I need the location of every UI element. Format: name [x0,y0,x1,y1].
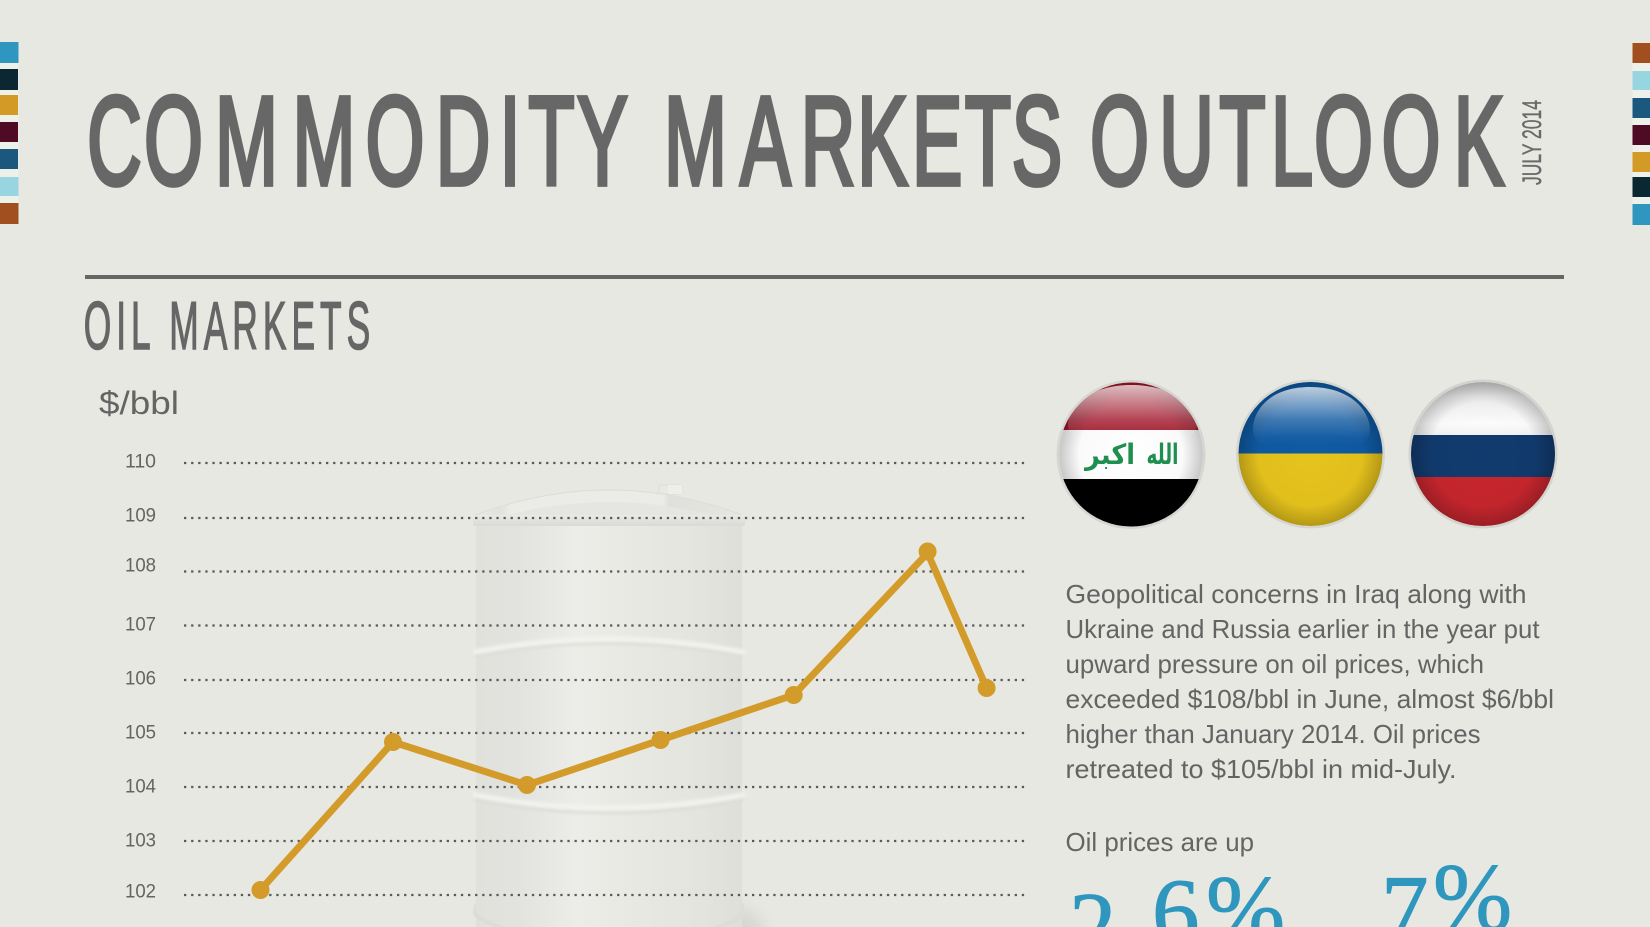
y axis labels: 104 [125,776,156,798]
date label: JULY 2014 [1517,100,1547,185]
y axis labels: 102 [125,882,156,902]
left colour swatch strip [0,42,18,224]
y axis labels: 110 [125,452,156,472]
axis unit label: $/bbl [99,385,179,421]
top rim [473,515,745,526]
barrel lid [473,490,745,518]
dotted gridlines [184,463,1025,895]
description paragraph: exceeded $108/bbl in June, almost $6/bbl [1066,684,1554,714]
y axis labels: 108 [125,556,156,576]
bottom rim [473,902,745,927]
y axis labels: 106 [125,668,156,690]
barrel cap [659,485,682,494]
y axis labels [125,452,156,902]
description paragraph: retreated to $105/bbl in mid-July. [1066,754,1456,784]
stat lead-in: Oil prices are up [1066,827,1254,857]
flag: Iraq [1055,380,1207,529]
upper barrel ring [474,639,744,656]
y axis labels: 105 [125,722,156,744]
title: COMMODITY MARKETS OUTLOOK [87,72,1504,212]
description paragraph: Geopolitical concerns in Iraq along with [1066,579,1526,609]
takbir inscription: اكبر [1083,438,1135,471]
barrel shadow [692,906,764,927]
description paragraph: upward pressure on oil prices, which [1066,649,1484,679]
y axis labels: 103 [125,830,156,852]
oil barrel illustration [473,485,764,927]
right colour swatch strip [1632,43,1650,225]
flag: Russia [1408,380,1560,529]
section heading: oil markets: OIL MARKETS [84,289,370,364]
lower barrel ring [474,795,744,812]
description paragraph [1066,579,1554,784]
description paragraph: Ukraine and Russia earlier in the year put [1066,614,1540,644]
takbir inscription: الله [1146,438,1178,471]
y axis labels: 107 [125,614,156,636]
oil price line chart [252,542,996,899]
y axis labels: 109 [125,506,156,526]
section rule [85,275,1564,279]
flag: Ukraine [1235,380,1387,528]
takbir inscription [1083,438,1178,471]
description paragraph: higher than January 2014. Oil prices [1066,719,1480,749]
barrel body [476,522,742,927]
